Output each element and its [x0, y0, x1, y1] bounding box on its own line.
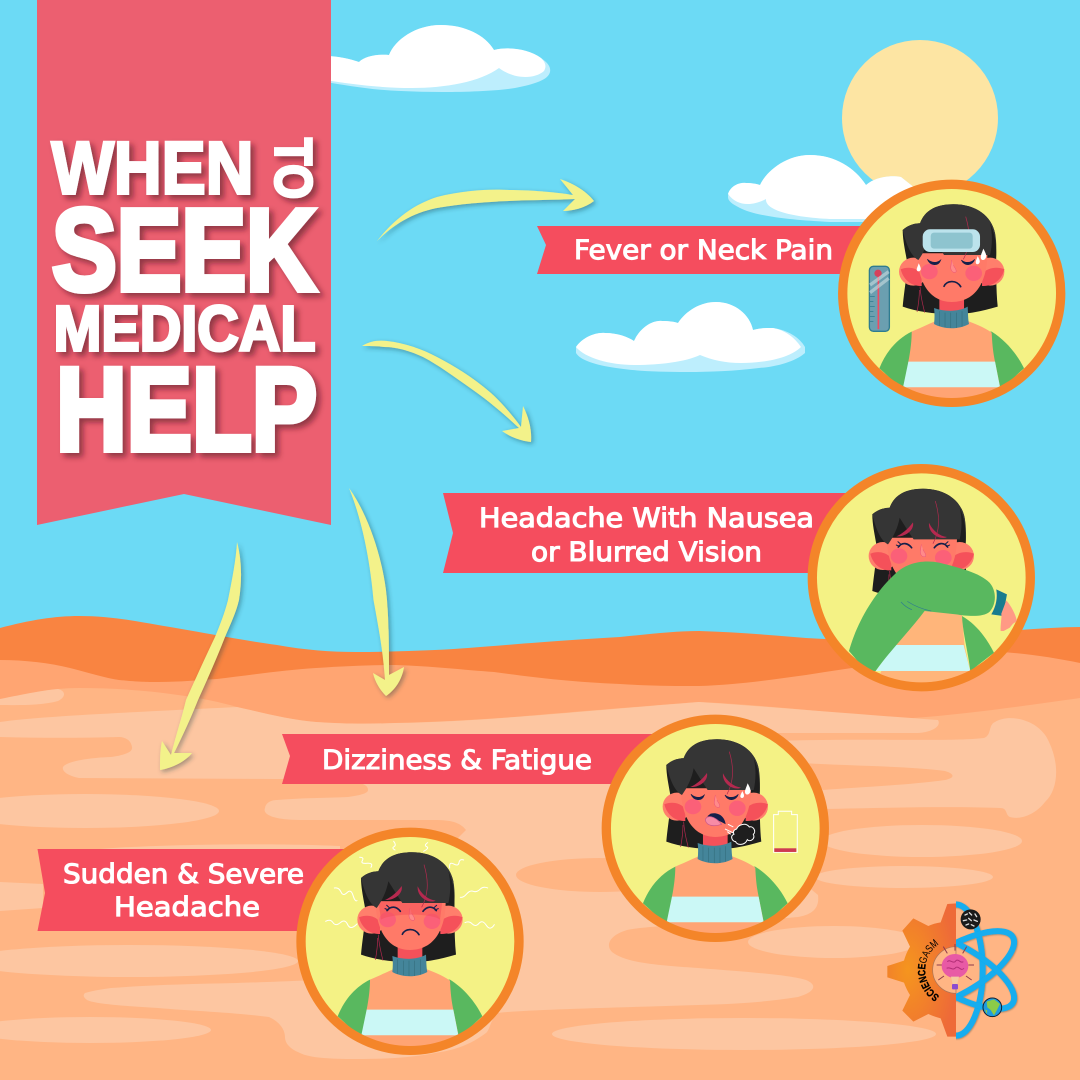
sweat drops: [917, 249, 986, 271]
desert: far orange dune: [0, 616, 1080, 1080]
cloud: top: [325, 25, 550, 92]
open mouth: [705, 813, 726, 826]
arrow: to dizziness: [349, 488, 404, 696]
sun: [842, 40, 998, 196]
illustration: sudden severe headache: [301, 832, 519, 1051]
logo hub: [933, 947, 956, 993]
ribbon: headache with nausea or blurred vision: or Blurred Vision: [531, 537, 762, 568]
logo atom: [956, 901, 1019, 1040]
low battery: [774, 811, 797, 852]
ribbon: dizziness and fatigue: [282, 734, 670, 784]
arrow: to headache with nausea: [362, 341, 531, 442]
sweat drops: [740, 783, 750, 798]
illustration: coughing into elbow: [812, 469, 1030, 688]
raised arm: [849, 561, 1017, 671]
logo moon: [961, 909, 981, 929]
logo wordmark: SCIENCEGASM: [918, 939, 939, 1002]
cloud: right behind circle: [728, 155, 930, 222]
ribbon: sudden and severe headache: [38, 849, 360, 931]
ribbon: sudden and severe headache: Headache: [114, 892, 260, 923]
ribbon: dizziness and fatigue: Dizziness & Fatigue: [322, 745, 592, 776]
breath puff: [725, 824, 755, 844]
title: When to Seek Medical Help: WHEN: [52, 126, 254, 210]
title banner: [37, 0, 331, 525]
illustration: fever: [843, 184, 1061, 403]
title: When to Seek Medical Help: [52, 126, 322, 476]
logo gear: [887, 903, 956, 1037]
logo earth: [983, 998, 1002, 1017]
ribbon: fever or neck pain: [537, 226, 880, 274]
logo: sciencegasm: [887, 901, 1019, 1040]
desert: darker sand patches: [516, 763, 952, 892]
ribbon: headache with nausea or blurred vision: Headache With Nausea: [479, 503, 814, 534]
cooling pad: [923, 229, 980, 252]
pain squiggles: [326, 841, 494, 928]
illustration: dizziness and fatigue: [606, 719, 824, 938]
torso: [876, 611, 994, 682]
ribbon: sudden and severe headache: Sudden & Severe: [63, 859, 304, 890]
title: When to Seek Medical Help: HELP: [56, 344, 317, 476]
title: When to Seek Medical Help: MEDICAL: [54, 292, 316, 364]
desert: sand base: [0, 688, 1080, 1080]
ribbon: headache with nausea or blurred vision: [443, 493, 860, 573]
arrow: to sudden headache: [160, 542, 241, 770]
thermometer: [869, 266, 889, 331]
desert: light sand patches: [0, 689, 1056, 1059]
cloud: middle: [576, 302, 805, 372]
desert: mid peach dune: [0, 652, 1080, 1080]
title: When to Seek Medical Help: TO: [264, 138, 322, 199]
title: When to Seek Medical Help: SEEK: [52, 185, 316, 315]
logo brain bulb: [937, 944, 974, 989]
arrow: to fever: [377, 179, 594, 241]
ribbon: fever or neck pain: Fever or Neck Pain: [574, 235, 833, 266]
